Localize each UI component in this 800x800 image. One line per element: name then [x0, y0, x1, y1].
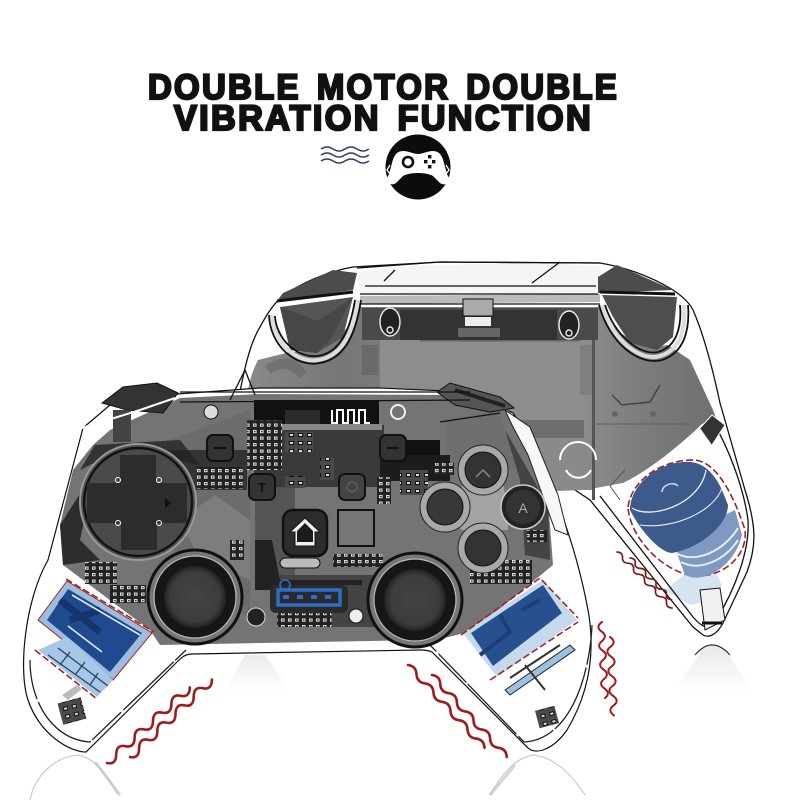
- solder pad clusters: [85, 420, 547, 627]
- home button: [283, 510, 327, 556]
- title: VIBRATION FUNCTION: [174, 99, 593, 138]
- grip QR marks: [58, 685, 559, 728]
- circuit board centre dark area: [167, 400, 450, 627]
- back controller: [240, 262, 754, 636]
- plus button: [380, 435, 406, 461]
- vibration waves: back grip: [617, 552, 672, 608]
- battery clip screws: [380, 308, 579, 339]
- right analog stick: [368, 553, 462, 647]
- title: [148, 68, 619, 138]
- icon: blue vibration waves: [321, 147, 369, 163]
- blue motor drum: [630, 462, 728, 553]
- inner shell contour: [30, 625, 592, 742]
- button Y: [420, 482, 470, 532]
- minus button: [207, 435, 233, 461]
- d-pad: [80, 444, 196, 560]
- ABXY button cross: [456, 486, 508, 530]
- antenna trace: [332, 410, 370, 423]
- button B: [458, 523, 508, 573]
- back grip inner lines: [600, 415, 748, 630]
- bumpers: [82, 383, 568, 535]
- front top lines: [180, 370, 500, 422]
- vibration waves: right side: [598, 622, 617, 715]
- right trigger: [598, 265, 688, 361]
- back controller shell: [240, 262, 754, 636]
- T button: T: [258, 480, 266, 495]
- right motor: [461, 578, 578, 695]
- left motor: [35, 579, 154, 699]
- crystal: [280, 558, 320, 568]
- clear top window: [357, 262, 600, 326]
- button A: [501, 485, 545, 529]
- icon: vibrating gamepad badge: [386, 134, 450, 200]
- front PCB grey area: [60, 394, 553, 645]
- vibration waves: left grip: [107, 680, 212, 763]
- capture button: [339, 474, 365, 500]
- front controller: [24, 370, 592, 752]
- small holes: [204, 405, 405, 626]
- main chip: [338, 510, 374, 546]
- T button: [249, 474, 275, 500]
- vibration waves: right grip: [408, 665, 507, 757]
- button A: A: [518, 500, 528, 516]
- left trigger: [269, 270, 361, 364]
- lower motor housing: [672, 510, 742, 578]
- button X: [458, 445, 508, 495]
- left analog stick: [148, 550, 242, 644]
- back controller grey battery housing: [244, 307, 716, 500]
- blue connector: [270, 580, 348, 613]
- back controller grip motor: [628, 460, 745, 605]
- title: DOUBLE MOTOR DOUBLE: [148, 68, 619, 107]
- front controller shell: [24, 388, 591, 752]
- floor reflections: [30, 645, 752, 800]
